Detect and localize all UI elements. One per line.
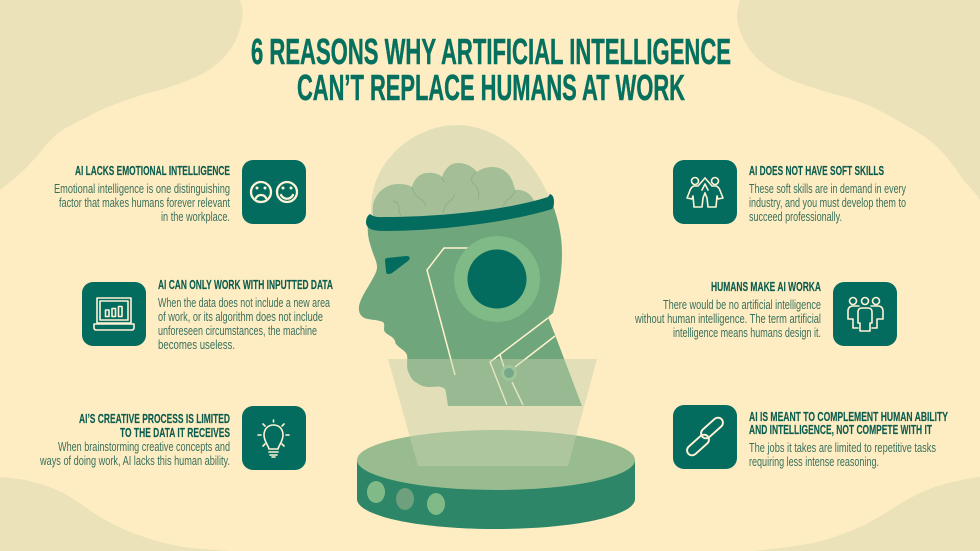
text block: factor that makes humans forever relevant [59, 196, 230, 210]
text block [39, 440, 230, 468]
heading [749, 409, 948, 437]
text block: These soft skills are in demand in every [749, 182, 906, 196]
heading [79, 411, 230, 440]
eye [385, 256, 410, 274]
text block [749, 182, 906, 224]
icon: two people high five [673, 160, 737, 224]
text block [158, 296, 330, 352]
text block [54, 182, 230, 224]
circuit node [501, 365, 517, 381]
text block: in the workplace. [161, 210, 230, 224]
text block [749, 441, 936, 469]
background blob: bottom right [753, 477, 980, 551]
text block: ways of doing work, AI lacks this human ability. [39, 454, 230, 468]
heading: AI’S CREATIVE PROCESS IS LIMITED [79, 411, 230, 426]
text block: industry, and you must develop them to [749, 196, 906, 210]
text block: unforeseen circumstances, the machine [158, 324, 317, 338]
circuit lines [427, 248, 555, 405]
title: CAN’T REPLACE HUMANS AT WORK [297, 67, 685, 108]
panel: AI is meant to complement human ability [673, 405, 948, 469]
central illustration: robot head on projector [357, 125, 635, 529]
text block: There would be no artificial intelligence [663, 298, 821, 312]
icon: laptop with chart [82, 282, 146, 346]
text block: of work, or its algorithm does not include [158, 310, 323, 324]
heading: AI DOES NOT HAVE SOFT SKILLS [749, 163, 884, 178]
background blob: top left [0, 0, 243, 190]
icon: light bulb [242, 406, 306, 470]
text block: without human intelligence. The term artificial [634, 312, 821, 326]
panel: AI lacks emotional intelligence [54, 160, 306, 224]
background blob: bottom left [0, 477, 230, 551]
background blob: top right [737, 0, 980, 200]
panel: AI's creative process is limited [39, 406, 306, 470]
head band [366, 194, 554, 231]
text block: Emotional intelligence is one distinguishing [54, 182, 230, 196]
text block: requiring less intense reasoning. [749, 455, 879, 469]
text block: When the data does not include a new area [158, 296, 330, 310]
panel: AI can only work with inputted data [82, 277, 333, 352]
ear core [468, 250, 526, 308]
heading: AI CAN ONLY WORK WITH INPUTTED DATA [158, 277, 333, 292]
text block: succeed professionally. [749, 210, 842, 224]
panel: AI does not have soft skills [673, 160, 906, 224]
brain [373, 163, 535, 218]
text block: becomes useless. [158, 338, 235, 352]
ear ring [454, 236, 540, 322]
hologram beam [388, 359, 597, 466]
panel: humans make AI work [634, 279, 897, 346]
text block: When brainstorming creative concepts and [58, 440, 230, 454]
glass dome [371, 125, 549, 222]
icon: chain link [673, 405, 737, 469]
text block [634, 298, 821, 340]
icon: team of three people [833, 282, 897, 346]
text block: intelligence means humans design it. [673, 326, 821, 340]
title [251, 31, 731, 108]
projector base [357, 430, 635, 529]
heading: TO THE DATA IT RECEIVES [120, 425, 230, 440]
heading: HUMANS MAKE AI WORKA [711, 279, 821, 294]
icon: sad and happy faces [242, 160, 306, 224]
heading: AI LACKS EMOTIONAL INTELLIGENCE [75, 163, 230, 178]
head silhouette [359, 205, 582, 406]
